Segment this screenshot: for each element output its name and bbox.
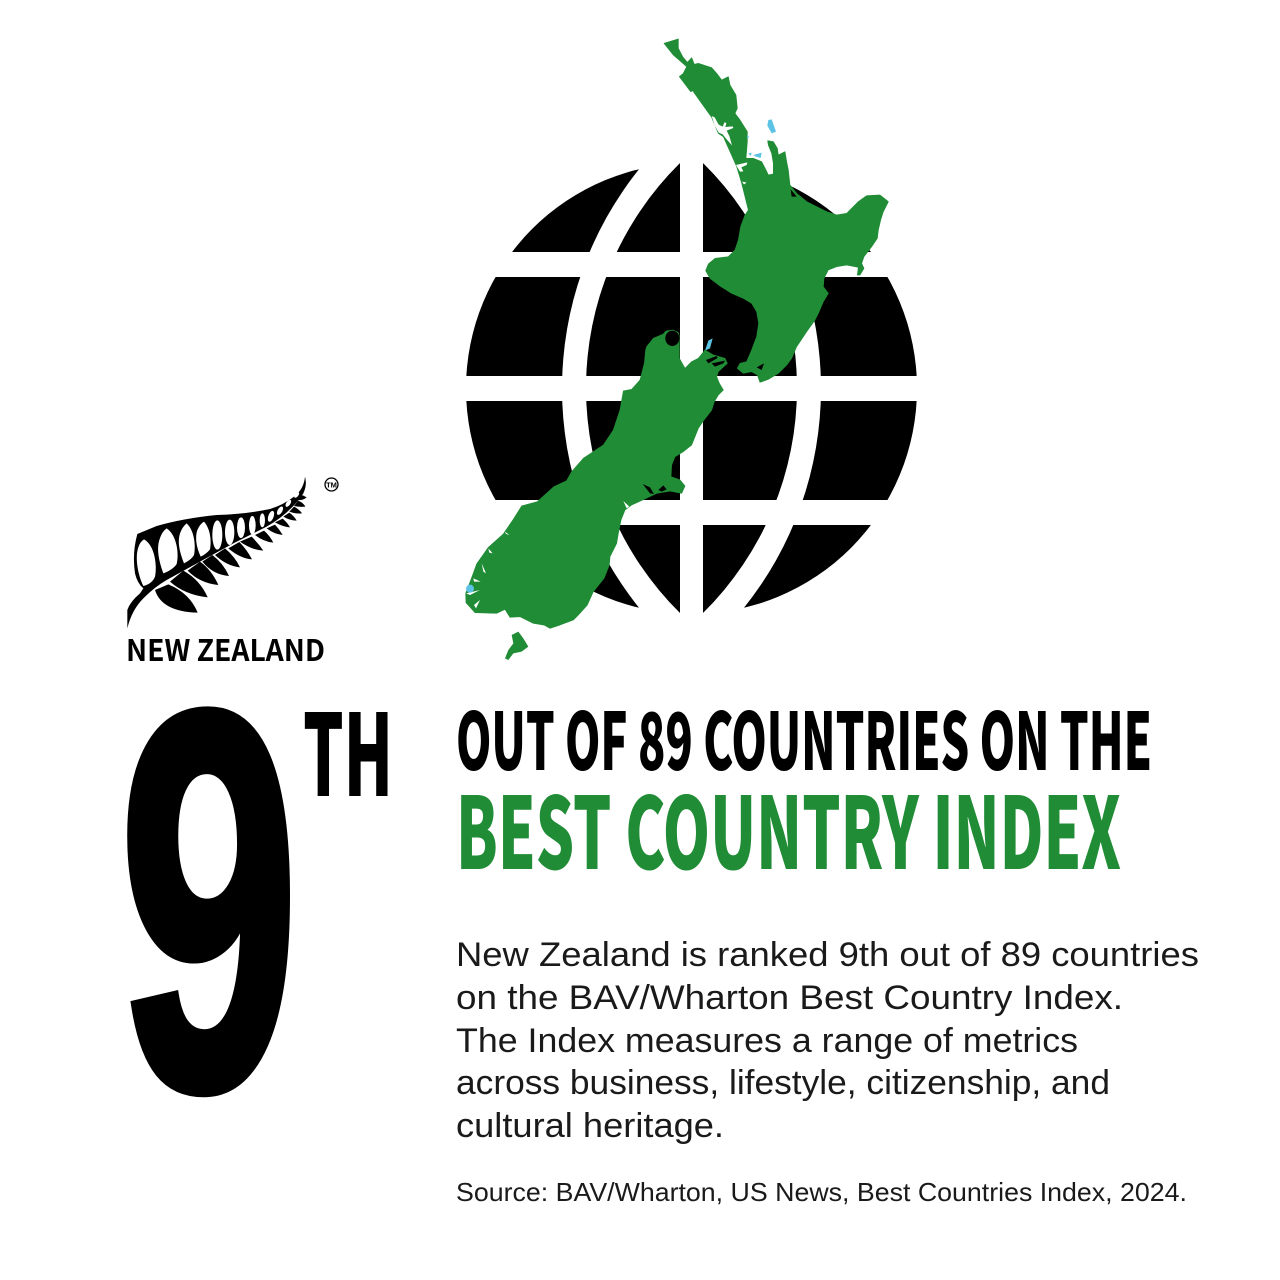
map: South Island	[466, 330, 727, 660]
icon: trademark	[325, 478, 338, 491]
body text: New Zealand is ranked 9th out of 89 countries	[456, 936, 1199, 974]
icon: trademark: TM	[326, 480, 337, 489]
body text: The Index measures a range of metrics	[456, 1022, 1078, 1060]
lake: Fiordland	[466, 585, 474, 593]
body text: cultural heritage.	[456, 1107, 724, 1145]
source note: Source: BAV/Wharton, US News, Best Countries Index, 2024.	[456, 1177, 1187, 1207]
heading	[456, 678, 1152, 898]
map: North Island	[664, 39, 888, 382]
body text	[456, 936, 1199, 1145]
logo: silver fern New Zealand	[126, 477, 338, 670]
icon: globe	[460, 150, 925, 625]
body text: across business, lifestyle, citizenship, and	[456, 1064, 1110, 1102]
map: Stewart Island	[505, 632, 528, 660]
logo wordmark: NEW ZEALAND	[126, 626, 325, 670]
body text: on the BAV/Wharton Best Country Index.	[456, 979, 1123, 1017]
icon: silver fern	[127, 477, 307, 628]
big rank: 9th	[119, 601, 393, 1202]
numeral 9: 9	[119, 601, 299, 1202]
islands: Great Barrier and Hauraki Gulf	[705, 119, 776, 351]
superscript TH: TH	[303, 665, 393, 829]
